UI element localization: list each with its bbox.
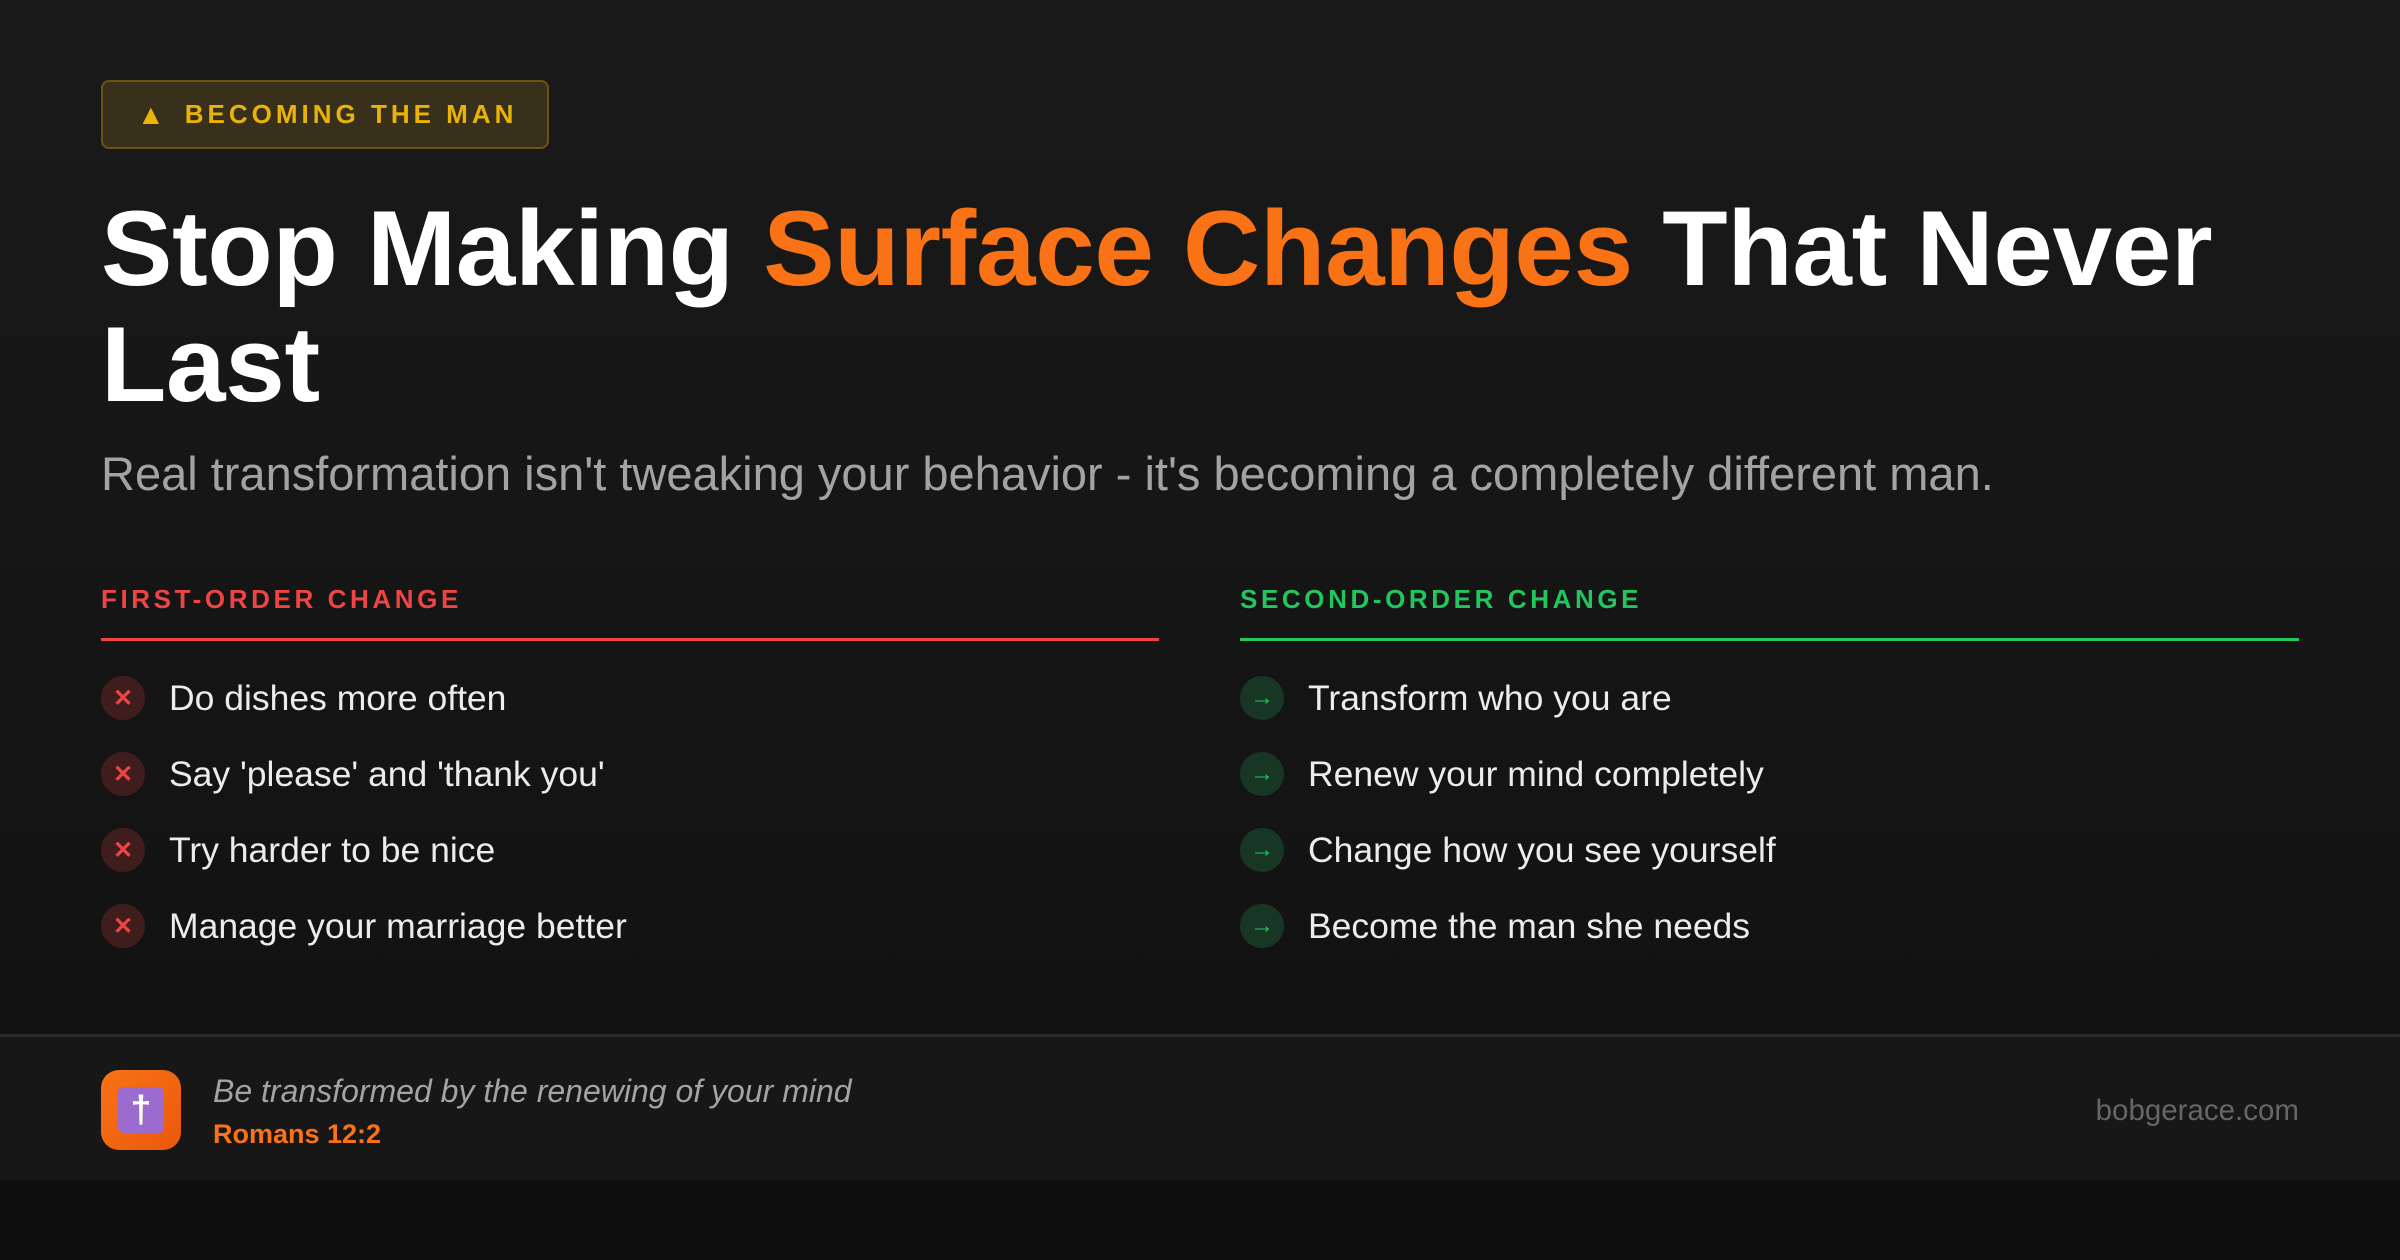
list: second-order items [1240,676,1776,948]
title: Last [101,304,320,424]
title [101,188,2212,424]
item: Do dishes more often [169,678,506,718]
heading: second-order change: SECOND-ORDER CHANGE [1240,584,1642,614]
badge: BECOMING THE MAN [185,99,517,129]
icon: cross [101,1070,181,1150]
item: ✕ [113,760,133,788]
item: Manage your marriage better [169,906,627,946]
item: ✕ [113,836,133,864]
list: first-order items [101,676,627,948]
item: Transform who you are [1308,678,1672,718]
item: ✕ [113,912,133,940]
item: → [1250,760,1274,787]
item: → [1250,684,1274,711]
item: Renew your mind completely [1308,754,1764,794]
heading: first-order change: FIRST-ORDER CHANGE [101,584,462,614]
badge: ▲ [137,98,169,130]
item: Change how you see yourself [1308,830,1776,870]
website: bobgerace.com [2096,1094,2299,1127]
title: Stop Making Surface Changes That Never [101,188,2212,308]
item: → [1250,836,1274,863]
item: Try harder to be nice [169,830,495,870]
badge [101,80,549,149]
item: Become the man she needs [1308,906,1750,946]
quote: Be transformed by the renewing of your mind [213,1073,852,1109]
item: → [1250,912,1274,939]
subtitle: Real transformation isn't tweaking your behavior - it's becoming a completely different man. [101,447,1994,500]
item: ✕ [113,684,133,712]
item: Say 'please' and 'thank you' [169,754,605,794]
icon: cross: † [130,1088,152,1130]
footer [0,1034,2400,1180]
reference: Romans 12:2 [213,1119,381,1149]
